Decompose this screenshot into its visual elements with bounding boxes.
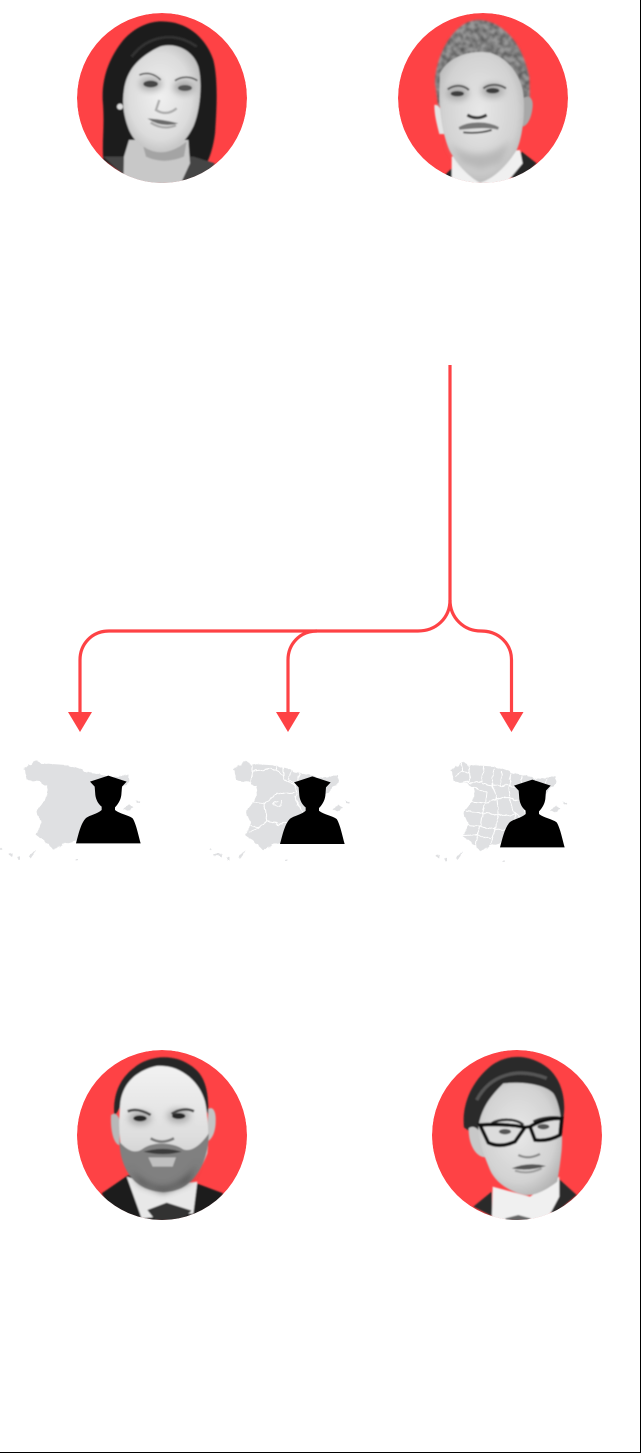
arrow: to right provincial map	[450, 600, 524, 732]
portrait: man with grey hair, top right	[398, 13, 568, 187]
portrait: woman, top left	[77, 13, 247, 187]
portrait: bearded man, bottom left	[77, 1050, 247, 1227]
icon: silhouette with cap, regional	[280, 776, 345, 844]
icon: silhouette with cap, national	[76, 776, 141, 843]
map: Spain national	[0, 761, 219, 860]
arrow: to left national map	[68, 600, 450, 732]
map: Spain by provinces	[435, 762, 568, 862]
portrait: man with glasses, bottom right	[432, 1050, 602, 1227]
icon: silhouette with cap, provincial	[500, 780, 565, 847]
vertical connector line	[448, 365, 452, 600]
arrow: to middle regional map	[276, 631, 317, 732]
map: Spain by regions	[218, 761, 350, 861]
